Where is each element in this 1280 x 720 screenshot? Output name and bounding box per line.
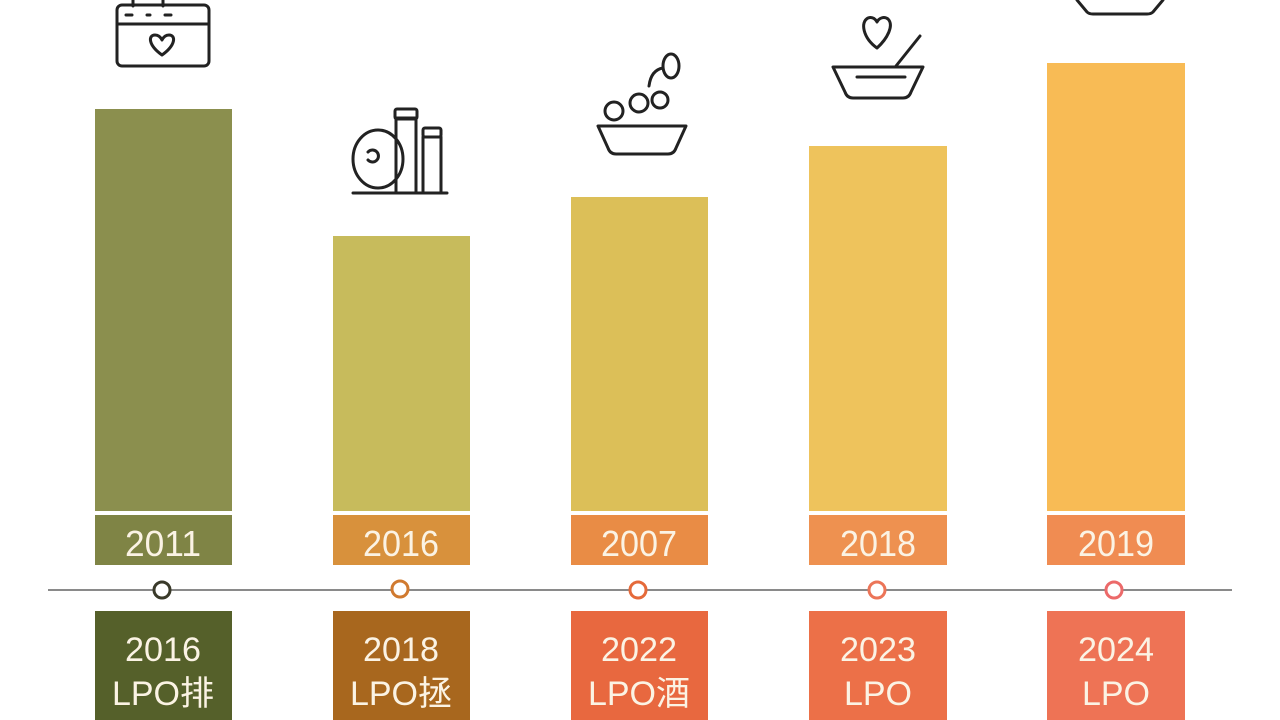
- bottom boxes: LPO: [844, 675, 912, 713]
- year labels: [95, 515, 1185, 565]
- icon: jars and plate: [353, 109, 447, 193]
- bottom boxes: [95, 611, 1185, 720]
- bottom boxes: 2018: [363, 631, 439, 669]
- icon: container: [1077, 0, 1163, 14]
- bottom boxes: 2016: [125, 631, 201, 669]
- icon: bowl with heart and spoon: [833, 17, 923, 98]
- bottom boxes: 2022: [601, 631, 677, 669]
- bottom boxes: LPO排: [112, 675, 214, 713]
- year labels: 2019: [1078, 523, 1154, 564]
- icon: lunchbox with heart: [117, 0, 209, 66]
- bar chart: [95, 63, 1185, 511]
- year labels: 2011: [125, 523, 201, 564]
- year labels: 2016: [363, 523, 439, 564]
- bottom boxes: LPO酒: [588, 675, 690, 713]
- bottom boxes: 2023: [840, 631, 916, 669]
- bottom boxes: LPO拯: [350, 675, 452, 713]
- year labels: 2007: [601, 523, 677, 564]
- timeline: [48, 581, 1232, 598]
- year labels: 2018: [840, 523, 916, 564]
- icon: salad bowl: [598, 54, 686, 154]
- bottom boxes: 2024: [1078, 631, 1154, 669]
- bottom boxes: LPO: [1082, 675, 1150, 713]
